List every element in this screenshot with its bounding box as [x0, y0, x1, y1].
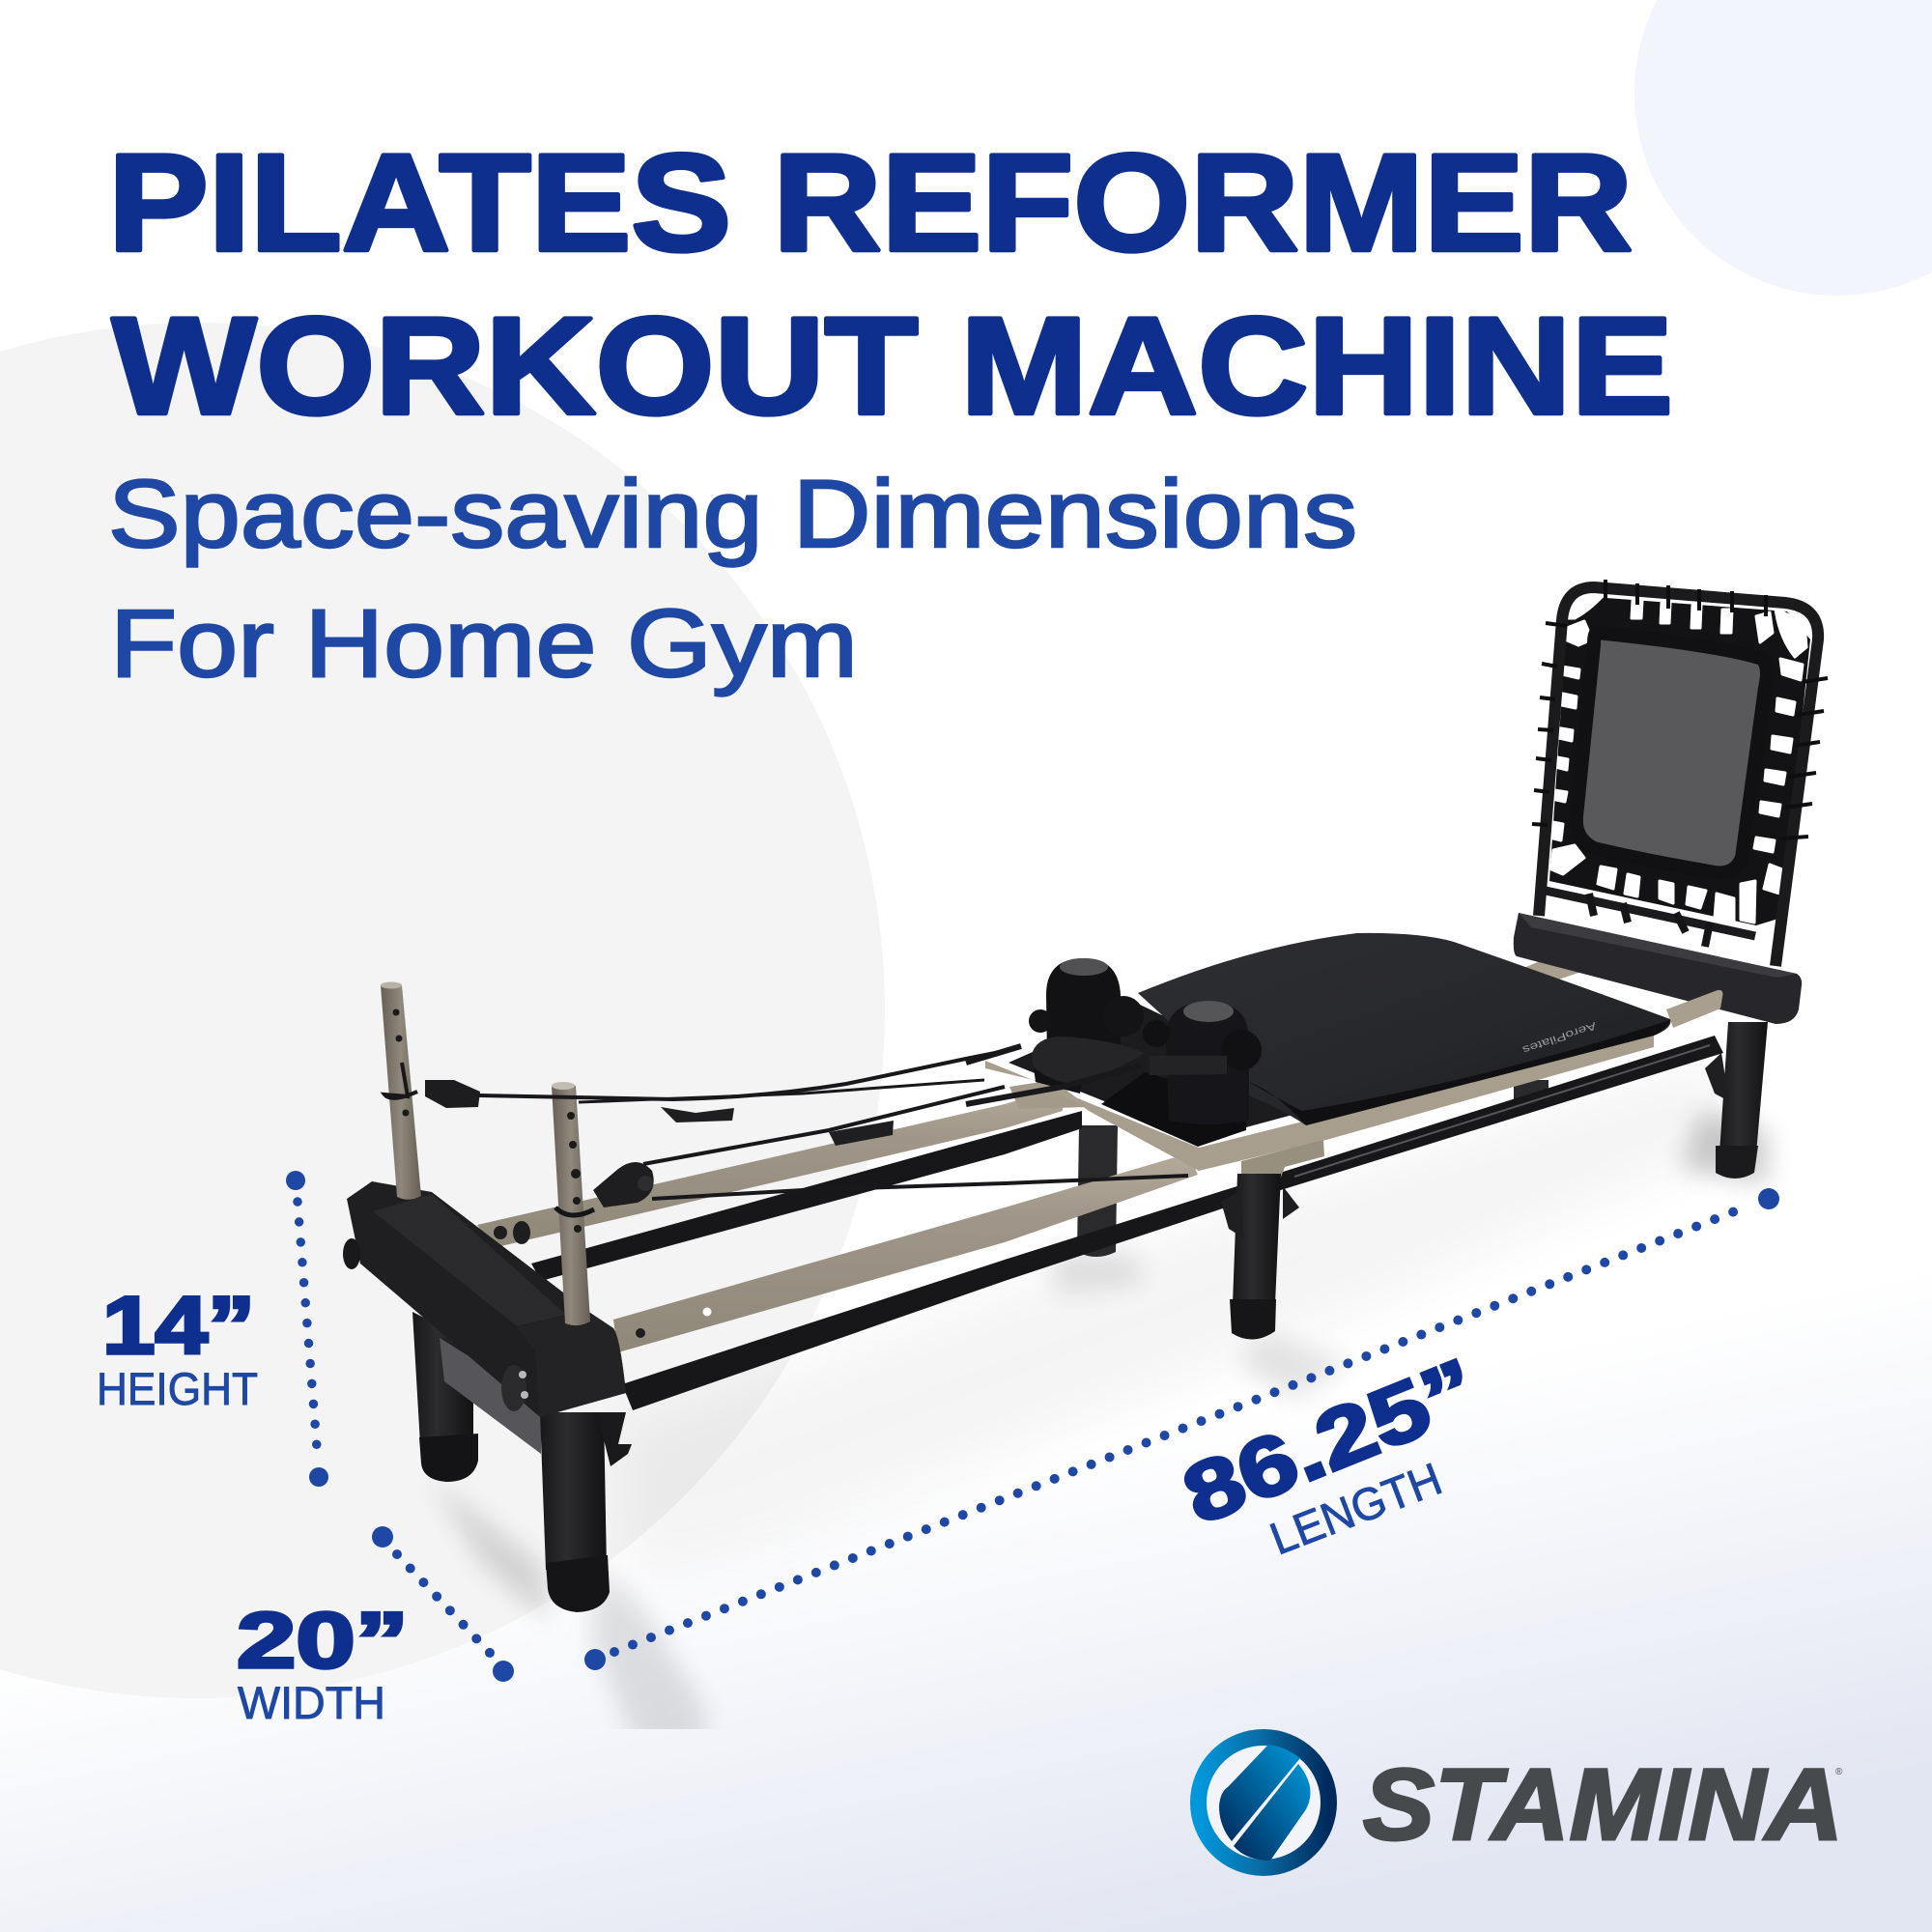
dimension: length label: LENGTH [1264, 1453, 1448, 1564]
cables [384, 1051, 1188, 1199]
logo icon: Stamina emblem [1198, 1737, 1329, 1868]
adjustable post front [552, 1082, 590, 1325]
handle two [829, 1121, 894, 1146]
rail bolts [494, 1221, 645, 1338]
carriage cables [966, 1046, 1140, 1104]
dimension: height dots [286, 1171, 328, 1487]
carriage frame [985, 1034, 1654, 1171]
textured top [373, 1194, 566, 1326]
adjustable post rear [381, 981, 421, 1200]
dimension: width label: 20” [237, 1597, 409, 1685]
rounded front corner [517, 1311, 626, 1417]
net webbing [1549, 597, 1810, 925]
subtitle: For Home Gym [110, 589, 858, 696]
far tan rail section near head [1517, 952, 1584, 987]
reformer machine [343, 580, 1828, 1612]
front black bar [622, 1036, 1723, 1410]
subtitle [108, 460, 1357, 696]
net gaps [1546, 595, 1806, 923]
handle one [661, 1107, 734, 1122]
side knob [343, 1238, 360, 1269]
dimension: length dots [584, 1188, 1779, 1670]
cross piece under pad [1514, 1080, 1548, 1101]
back front leg [412, 1312, 478, 1482]
lower cross bar [1546, 891, 1755, 936]
dimension: length label [1171, 1341, 1491, 1564]
tan rail hole [703, 1308, 711, 1316]
cord loops [1532, 580, 1828, 838]
pad [1138, 933, 1670, 1125]
pad logo text: AeroPilates [1520, 1019, 1598, 1056]
title: WORKOUT MACHINE [112, 290, 1673, 443]
lower strap remnants [1589, 894, 1710, 947]
shoulder block rear [1029, 958, 1145, 1094]
logo wordmark: ® [1835, 1767, 1843, 1777]
head block [1514, 913, 1802, 1024]
dimension: height label: HEIGHT [97, 1363, 258, 1414]
decorative circle: large grey left [0, 323, 885, 1698]
ratchet clip [425, 1080, 480, 1108]
dimension: length label: 86.25” [1171, 1341, 1491, 1543]
front near leg [540, 1412, 610, 1612]
leg brace [440, 1338, 541, 1454]
front tan rail [613, 1153, 1198, 1352]
pad front edge [1249, 1020, 1670, 1125]
mesh panel [1577, 633, 1767, 872]
dimension: width dots [372, 1526, 514, 1682]
dimension: height label [97, 1280, 258, 1414]
bolts [501, 1365, 526, 1411]
carriage inner tray [1009, 1005, 1343, 1140]
title [108, 127, 1673, 443]
floor shadows [430, 1053, 1768, 1748]
rear black bar [531, 1111, 1082, 1281]
logo wordmark: STAMINA [1363, 1748, 1843, 1861]
highlight on front bar [1294, 1045, 1710, 1177]
dimension: width label: WIDTH [238, 1677, 385, 1728]
head block top face [1519, 913, 1797, 978]
head end hardware [1705, 1053, 1729, 1101]
tan rails at head end [1666, 990, 1722, 1028]
foot end block [343, 1181, 626, 1417]
middle leg near [1221, 1174, 1299, 1340]
far legs [1077, 1022, 1768, 1257]
carriage [966, 933, 1670, 1198]
carriage bracket [1241, 1140, 1324, 1198]
subtitle: Space-saving Dimensions [108, 460, 1357, 567]
title: PILATES REFORMER [108, 127, 1633, 280]
shoulder block front [1101, 1001, 1262, 1147]
dimension: height label: 14” [102, 1280, 255, 1371]
head frame [1539, 587, 1818, 966]
rear carriage arm [1009, 1080, 1089, 1109]
rear tan rail [477, 1087, 1063, 1248]
decorative circle: top right [1634, 0, 1932, 296]
pulley [555, 1162, 654, 1215]
leg clip hardware [597, 1412, 632, 1466]
dimension: width label [237, 1597, 409, 1728]
head end [1514, 580, 1828, 1024]
